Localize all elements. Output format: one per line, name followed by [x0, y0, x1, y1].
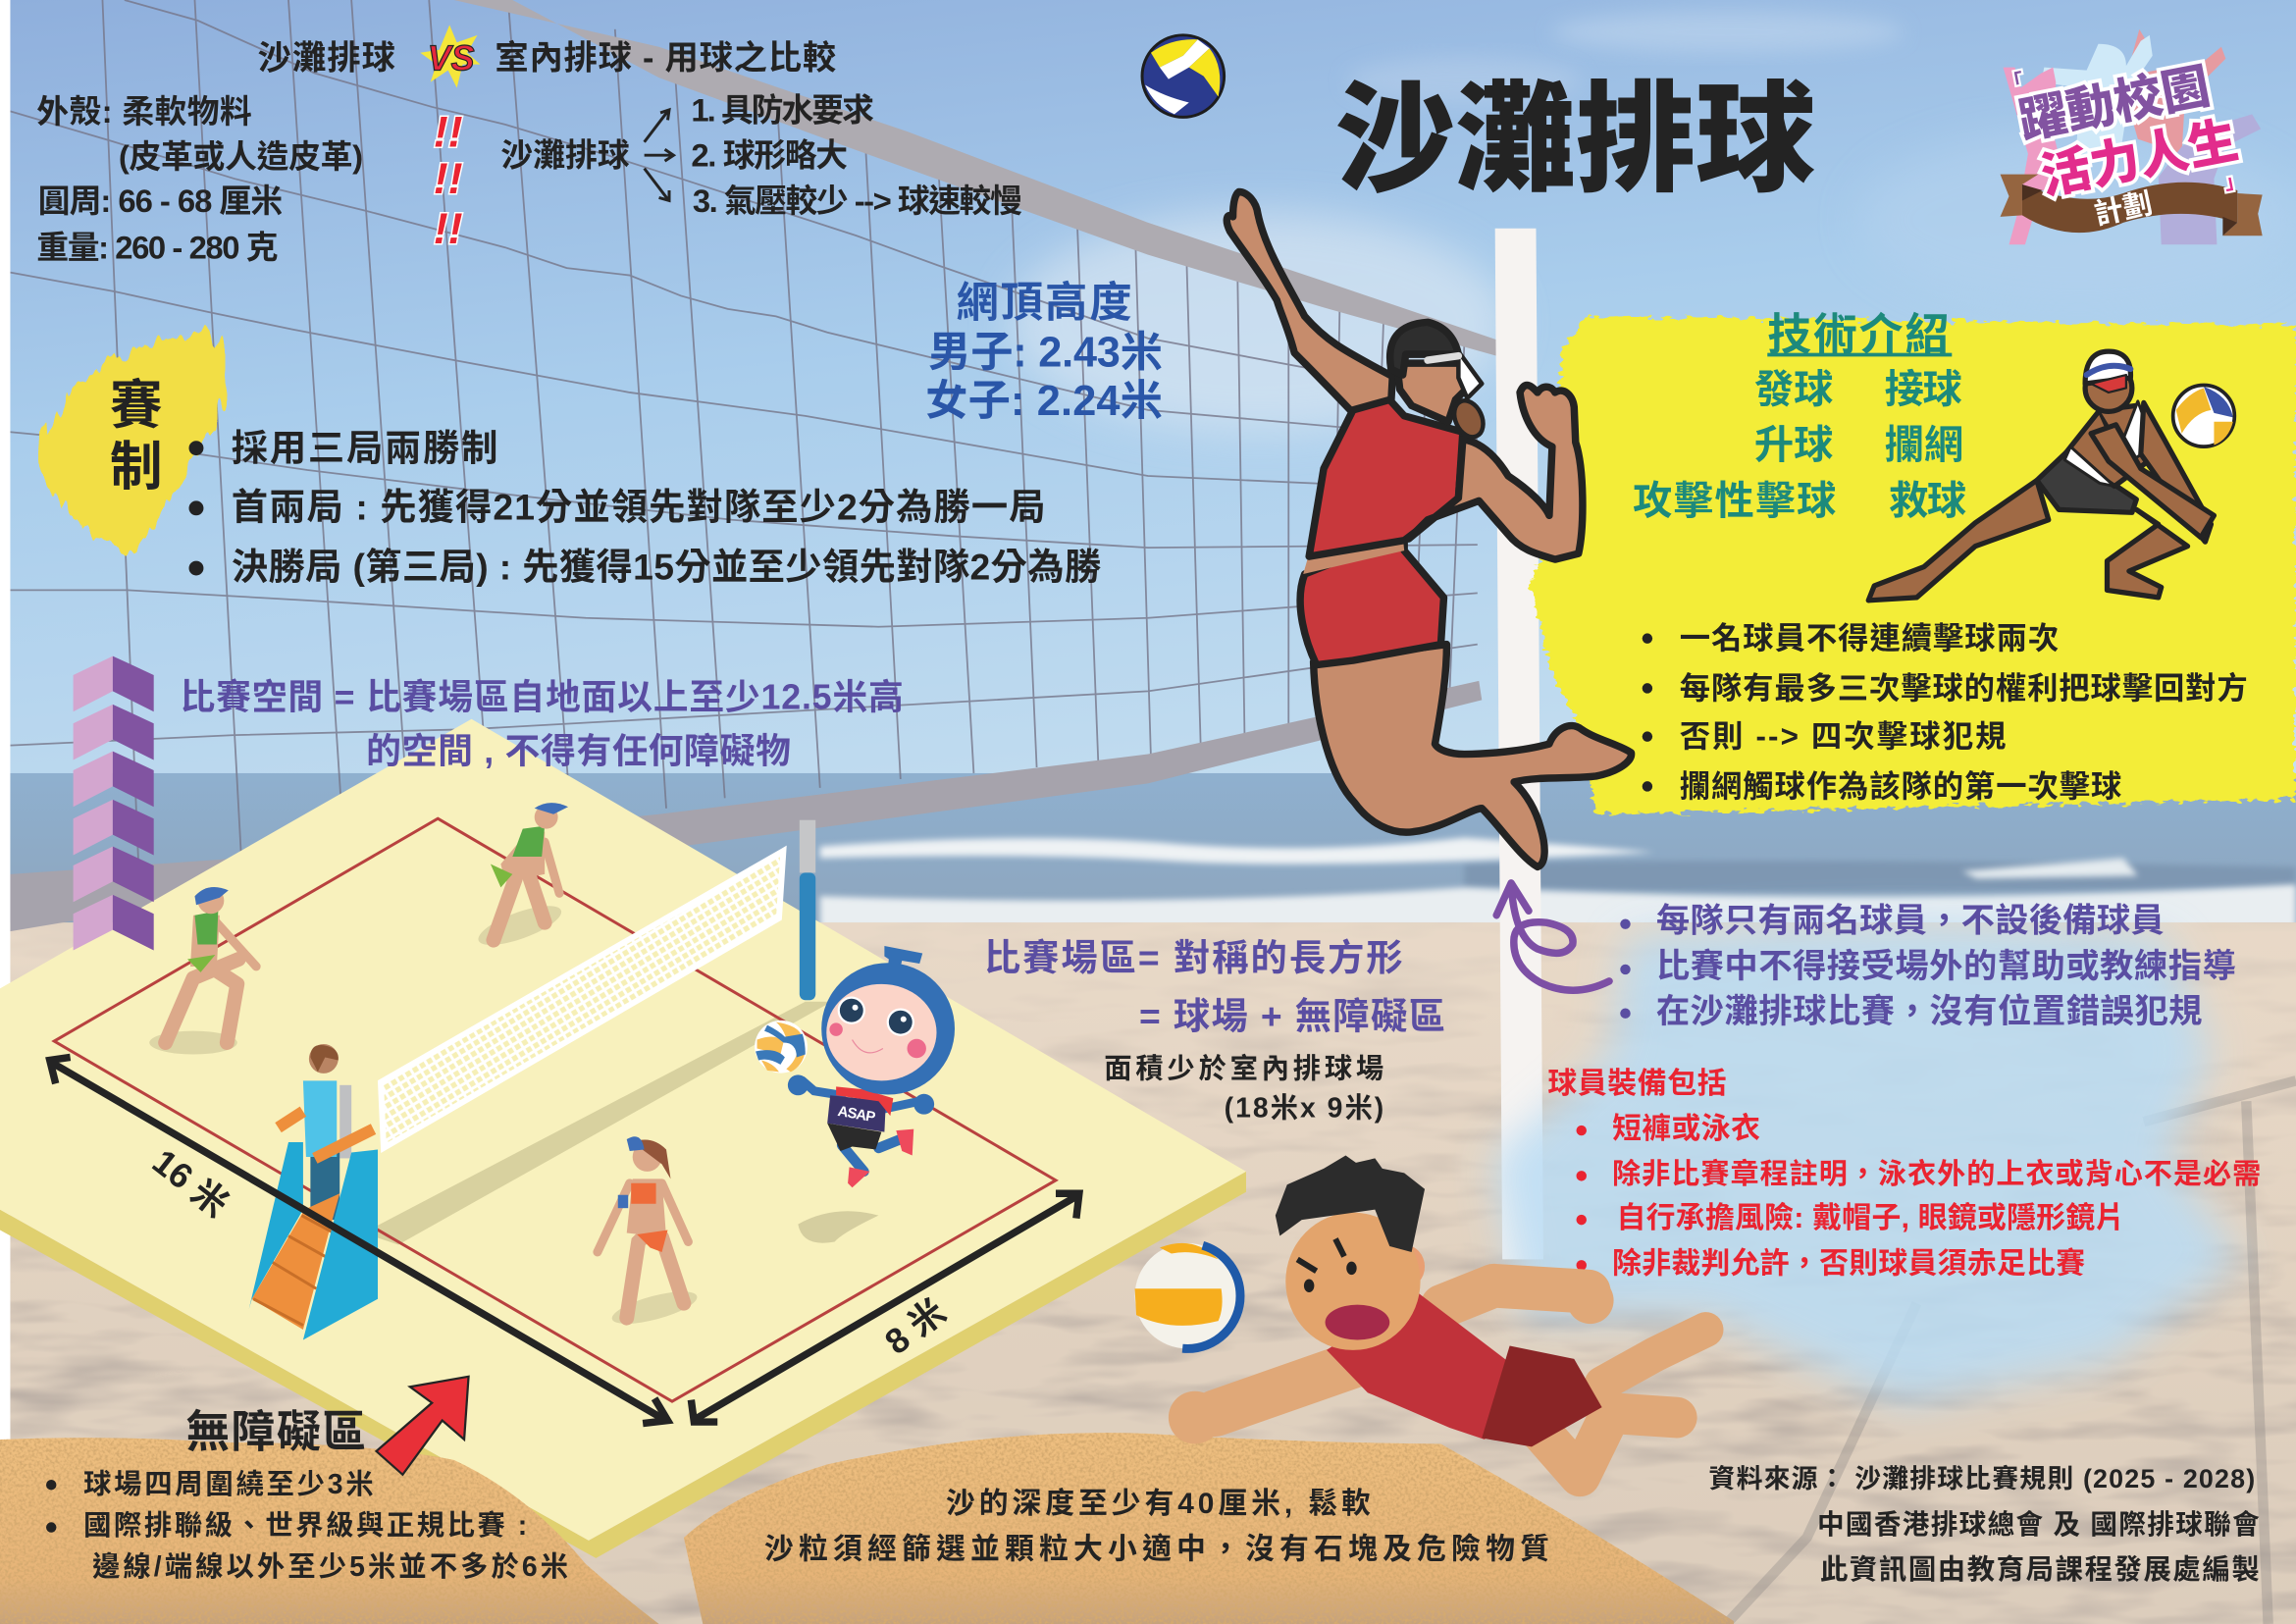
technique list: 接球 [1885, 367, 1962, 411]
VS burst icon [420, 25, 480, 88]
court net and posts [339, 820, 815, 1158]
dimension arrow: 16 m [50, 1057, 668, 1424]
exclamation marks: !! [434, 154, 463, 203]
dimension arrow: 8 m [691, 1193, 1079, 1422]
source credits [1709, 1464, 2260, 1586]
referee stand with referee [249, 1044, 378, 1339]
chevrons up icon [74, 656, 154, 951]
clearance zone text: 邊線/端線以外至少5米並不多於6米 [92, 1551, 568, 1583]
volleyball net in background [10, 0, 1496, 931]
sand requirement text: 沙的深度至少有40厘米, 鬆軟 [946, 1488, 1371, 1520]
comparison heading: 室內排球 - 用球之比較 [495, 40, 836, 78]
net height: 男子: 2.43米 [928, 330, 1163, 377]
ball specification: (皮革或人造皮革) [119, 138, 363, 175]
player: back right [491, 803, 568, 940]
logo: 躍動校園 [2014, 59, 2215, 149]
brush label: match format [35, 330, 226, 553]
equipment rules: 球員裝備包括 [1547, 1068, 1726, 1100]
team rules: 比賽中不得接受場外的幫助或教練指導 [1656, 948, 2236, 985]
logo: 「 [2002, 71, 2026, 96]
ball specification: 圓周: 66 - 68 厘米 [38, 183, 283, 219]
ball specification: 重量: 260 - 280 克 [36, 230, 279, 266]
equipment rules: 除非比賽章程註明，泳衣外的上衣或背心不是必需 [1612, 1158, 2261, 1190]
match format rules: 首兩局 : 先獲得21分並領先對隊至少2分為勝一局 [232, 486, 1046, 527]
logo: 活力人生 [2036, 112, 2242, 205]
comparison heading: 沙灘排球 [258, 40, 395, 78]
exclamation marks: !! [434, 107, 463, 156]
yellow brush panel [1531, 316, 2296, 814]
equipment rules: 自行承擔風險: 戴帽子, 眼鏡或隱形鏡片 [1617, 1202, 2124, 1234]
VS burst icon: VS [428, 39, 475, 79]
team rules: 在沙灘排球比賽，沒有位置錯誤犯規 [1656, 993, 2202, 1030]
squiggle arrow [1496, 883, 1609, 990]
technique list: 救球 [1889, 479, 1966, 523]
technique list: 攻擊性擊球 [1633, 479, 1836, 523]
sand pile right [684, 1433, 1734, 1624]
logo: 計劃 [2091, 187, 2156, 232]
team rules: 每隊只有兩名球員，不設後備球員 [1656, 903, 2165, 940]
top volleyball [1142, 35, 1225, 117]
court definition: 面積少於室內排球場 [1104, 1053, 1383, 1084]
court definition: (18米x 9米) [1225, 1093, 1383, 1125]
net height [925, 280, 1163, 425]
jumping player [1226, 191, 1632, 866]
exclamation marks [434, 107, 463, 253]
beach ball features: 2. 球形略大 [691, 137, 848, 174]
source credits: 中國香港排球總會 及 國際排球聯會 [1817, 1509, 2260, 1540]
sand requirement text: 沙粒須經篩選並顆粒大小適中，沒有石塊及危險物質 [764, 1533, 1549, 1565]
mascot [788, 946, 955, 1187]
ball specification: 外殼: 柔軟物料 [36, 93, 252, 130]
brush label: match format: 賽 [110, 376, 163, 435]
match format rules: 採用三局兩勝制 [232, 428, 497, 469]
play space text [181, 677, 904, 771]
digging player [1868, 351, 2214, 601]
contact rules: 否則 --> 四次擊球犯規 [1680, 719, 2007, 754]
team rules [1620, 903, 2236, 1030]
clearance zone text: 國際排聯級、世界級與正規比賽 : [83, 1510, 527, 1542]
equipment rules [1547, 1068, 2261, 1280]
contact rules: 攔網觸球作為該隊的第一次擊球 [1680, 769, 2121, 804]
match format rules: 決勝局 (第三局) : 先獲得15分並至少領先對隊2分為勝 [232, 547, 1101, 588]
blue cloud backdrop for player rules [1493, 922, 2240, 1406]
technique list: 發球 [1754, 367, 1833, 411]
technique list [1633, 367, 1966, 523]
net height: 女子: 2.24米 [925, 378, 1163, 425]
net post [1495, 229, 1543, 1259]
equipment rules: 短褲或泳衣 [1612, 1113, 1760, 1145]
play space text: 的空間 , 不得有任何障礙物 [366, 732, 791, 771]
red arrow to clearance zone [377, 1377, 469, 1475]
net height: 網頂高度 [957, 280, 1132, 327]
striped volleyball [1135, 1243, 1240, 1348]
logo: 」 [2222, 169, 2247, 194]
digging player ball [2173, 385, 2234, 446]
exclamation marks: !! [434, 204, 463, 253]
technique heading: 技術介紹 [1767, 311, 1949, 360]
comparison heading [258, 40, 836, 78]
match format rules [189, 428, 1101, 588]
beach ball features [500, 91, 1022, 219]
sand requirement text [764, 1488, 1549, 1565]
mascot: ASAP [836, 1103, 877, 1126]
beach ball features: 沙灘排球 [500, 137, 630, 174]
mascot volleyball [755, 1021, 808, 1074]
court definition: 比賽場區= 對稱的長方形 [984, 937, 1403, 978]
brush label: match format: 制 [110, 438, 163, 497]
logo [2001, 29, 2263, 244]
clearance zone text [46, 1408, 568, 1583]
contact rules: 每隊有最多三次擊球的權利把球擊回對方 [1680, 671, 2248, 706]
technique list: 攔網 [1885, 423, 1963, 467]
contact rules: 一名球員不得連續擊球兩次 [1680, 621, 2059, 655]
beach ball features: 1. 具防水要求 [691, 91, 874, 128]
ball specification [36, 93, 363, 266]
dimension label: 8 m: 8 米 [878, 1291, 953, 1362]
player: front [598, 1136, 688, 1318]
contact rules [1643, 621, 2248, 804]
sand court platform with court [0, 719, 1246, 1558]
technique list: 升球 [1754, 423, 1833, 467]
diving boy [1169, 1155, 1722, 1476]
beach ball features: 3. 氣壓較少 --> 球速較慢 [693, 183, 1022, 219]
dimension label: 16 m: 16 米 [145, 1142, 235, 1225]
source credits: 此資訊圖由教育局課程發展處編製 [1820, 1554, 2260, 1586]
play space text: 比賽空間 = 比賽場區自地面以上至少12.5米高 [181, 677, 904, 716]
court definition [984, 937, 1445, 1125]
clearance zone text: 球場四周圍繞至少3米 [83, 1469, 374, 1500]
court definition: = 球場 + 無障礙區 [1139, 996, 1445, 1037]
player: back left [166, 887, 256, 1043]
sand pile left [0, 1438, 659, 1624]
source credits: 資料來源： 沙灘排球比賽規則 (2025 - 2028) [1709, 1464, 2255, 1493]
clearance zone text: 無障礙區 [186, 1408, 366, 1457]
title: 沙灘排球 [1335, 72, 1816, 206]
left white margin [0, 0, 10, 1449]
equipment rules: 除非裁判允許，否則球員須赤足比賽 [1612, 1247, 2085, 1280]
